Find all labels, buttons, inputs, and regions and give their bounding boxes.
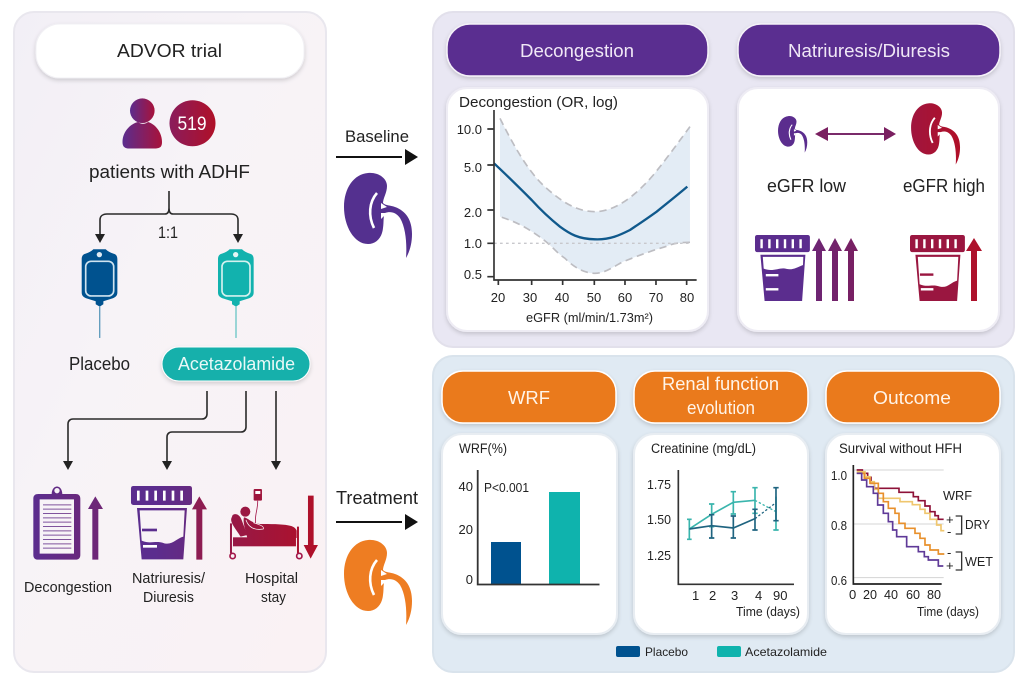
axis labels: 40 xyxy=(884,587,898,602)
y axis labels xyxy=(457,122,482,282)
legend: treatment arms xyxy=(616,645,827,659)
panel: survival chart: Survival without HFH xyxy=(839,441,962,456)
icon: clipboard with up arrow xyxy=(33,486,103,560)
icon: 519 patients badge xyxy=(170,100,216,146)
axis labels: 0 xyxy=(849,587,856,602)
bars xyxy=(478,470,600,584)
axis labels: 2 xyxy=(709,588,716,603)
text: Natriuresis/Diuresis xyxy=(132,570,206,606)
axis labels: 1.75 xyxy=(647,477,671,492)
panel: ADVOR trial xyxy=(14,12,326,672)
panel: WRF bar chart xyxy=(442,434,617,634)
heading: Natriuresis/Diuresis: Natriuresis/Diuresis xyxy=(788,41,950,61)
axis labels: 3 xyxy=(731,588,738,603)
icon: urine cup with one arrow xyxy=(910,235,982,301)
icon: baseline kidney xyxy=(344,173,412,258)
panel: creatinine chart xyxy=(634,434,808,634)
icon: treatment kidney xyxy=(344,540,412,625)
axis labels: 80 xyxy=(927,587,941,602)
icon: urine cup with three arrows xyxy=(755,235,858,301)
panel: creatinine chart: Creatinine (mg/dL) xyxy=(651,441,756,456)
heading: Renal function evolution: evolution xyxy=(687,398,755,418)
arrows: effects of acetazolamide xyxy=(63,391,281,470)
heading: Natriuresis/Diuresis xyxy=(738,24,1000,76)
icon: urine cup with up arrow xyxy=(131,486,207,560)
heading: WRF: WRF xyxy=(508,388,550,408)
heading: Decongestion xyxy=(447,24,708,76)
axis labels: 40 xyxy=(459,479,473,494)
text: Natriuresis/Diuresis: Natriuresis/ xyxy=(132,570,206,587)
legend: treatment arms: Placebo xyxy=(645,645,688,659)
icon: patient xyxy=(122,98,162,148)
heading: ADVOR trial xyxy=(36,24,304,78)
axis labels xyxy=(831,468,979,619)
p value: P<0.001 xyxy=(484,480,529,495)
legend: WRF groups: DRY xyxy=(965,517,990,532)
text: Hospital stay: Hospital xyxy=(245,570,298,587)
icons: outcome row xyxy=(33,486,318,560)
panel: survival chart xyxy=(826,434,1000,634)
heading: ADVOR trial: ADVOR trial xyxy=(117,41,222,61)
x axis labels: 50 xyxy=(587,290,601,305)
legend: WRF groups: + xyxy=(946,512,954,527)
chart title: Decongestion (OR, log) xyxy=(459,94,618,111)
text: Hospital stay xyxy=(245,570,298,606)
x axis labels: 30 xyxy=(523,290,537,305)
heading: Outcome: Outcome xyxy=(873,388,951,408)
panel: treatment results xyxy=(433,356,1014,672)
icon: small kidney xyxy=(778,116,807,153)
axis labels: 0.8 xyxy=(831,518,847,533)
heading: Renal function evolution: Renal function xyxy=(662,374,779,394)
icon: large kidney xyxy=(911,103,960,165)
heading: Decongestion: Decongestion xyxy=(520,41,634,61)
axis labels: 90 xyxy=(773,588,787,603)
icon: placebo IV bag xyxy=(82,249,117,338)
axis labels: 1.25 xyxy=(647,548,671,563)
y axis labels: 2.0 xyxy=(464,205,482,220)
axis labels xyxy=(647,477,800,619)
axis labels: 4 xyxy=(755,588,762,603)
x axis title: eGFR (ml/min/1.73m²) xyxy=(526,311,653,325)
arrow: treatment xyxy=(336,488,418,530)
axis labels: 1.50 xyxy=(647,512,671,527)
text: Hospital stay: stay xyxy=(261,589,286,606)
x axis labels: 40 xyxy=(555,290,569,305)
axis labels xyxy=(459,479,473,587)
legend: WRF groups: WET xyxy=(965,554,993,569)
arrow: baseline xyxy=(336,127,418,165)
legend: WRF groups: - xyxy=(947,545,951,560)
y axis labels: 0.5 xyxy=(464,267,482,282)
axis labels: 1.0 xyxy=(831,468,847,483)
axis labels: 0.6 xyxy=(831,573,847,588)
arrow: baseline: Baseline xyxy=(345,127,409,146)
axis labels: Time (days) xyxy=(917,604,979,619)
axis labels: 20 xyxy=(863,587,877,602)
text: Placebo: Placebo xyxy=(69,354,130,374)
heading: Outcome xyxy=(826,371,1000,423)
heading: WRF xyxy=(442,371,616,423)
text: eGFR low: eGFR low xyxy=(767,176,847,196)
x axis labels: 60 xyxy=(618,290,632,305)
line chart: OR vs eGFR xyxy=(487,110,697,285)
text: Decongestion: Decongestion xyxy=(24,579,112,596)
legend: WRF groups: - xyxy=(947,524,951,539)
panel: natriuresis/diuresis xyxy=(738,88,999,331)
x axis labels: 20 xyxy=(491,290,505,305)
kaplan-meier curves xyxy=(853,465,962,584)
arrow: double headed xyxy=(815,127,896,141)
legend: treatment arms: Acetazolamide xyxy=(745,645,827,659)
x axis labels xyxy=(491,290,694,305)
icon: acetazolamide IV bag xyxy=(218,249,254,338)
panel: decongestion chart xyxy=(447,88,708,331)
y axis labels: 10.0 xyxy=(457,122,482,137)
axis labels: 0 xyxy=(466,572,473,587)
text: Natriuresis/Diuresis: Diuresis xyxy=(143,589,194,606)
panel: WRF bar chart: WRF(%) xyxy=(459,441,507,456)
text: 1:1 ratio: 1:1 xyxy=(158,223,178,242)
x axis labels: 80 xyxy=(680,290,694,305)
arrow: treatment: Treatment xyxy=(336,488,418,508)
y axis labels: 5.0 xyxy=(464,160,482,175)
legend: WRF groups xyxy=(943,488,993,573)
label: Acetazolamide xyxy=(162,347,310,381)
icon: 519 patients badge: 519 xyxy=(178,114,206,135)
legend: WRF groups: + xyxy=(946,558,954,573)
axis labels: 1 xyxy=(692,588,699,603)
legend: WRF groups: WRF xyxy=(943,488,972,503)
icon: hospital bed with down arrow xyxy=(230,489,318,559)
text: patients with ADHF: patients with ADHF xyxy=(89,162,250,182)
axis labels: 60 xyxy=(906,587,920,602)
y axis labels: 1.0 xyxy=(464,236,482,251)
axis labels: 20 xyxy=(459,522,473,537)
label: Acetazolamide: Acetazolamide xyxy=(178,354,295,374)
arrow: randomisation split xyxy=(95,191,243,243)
panel: baseline results xyxy=(433,12,1014,347)
line chart: creatinine over time xyxy=(678,470,794,584)
x axis labels: 70 xyxy=(649,290,663,305)
text: eGFR high: eGFR high xyxy=(903,176,985,196)
heading: Renal function evolution xyxy=(634,371,808,423)
axis labels: Time (days) xyxy=(736,604,800,619)
